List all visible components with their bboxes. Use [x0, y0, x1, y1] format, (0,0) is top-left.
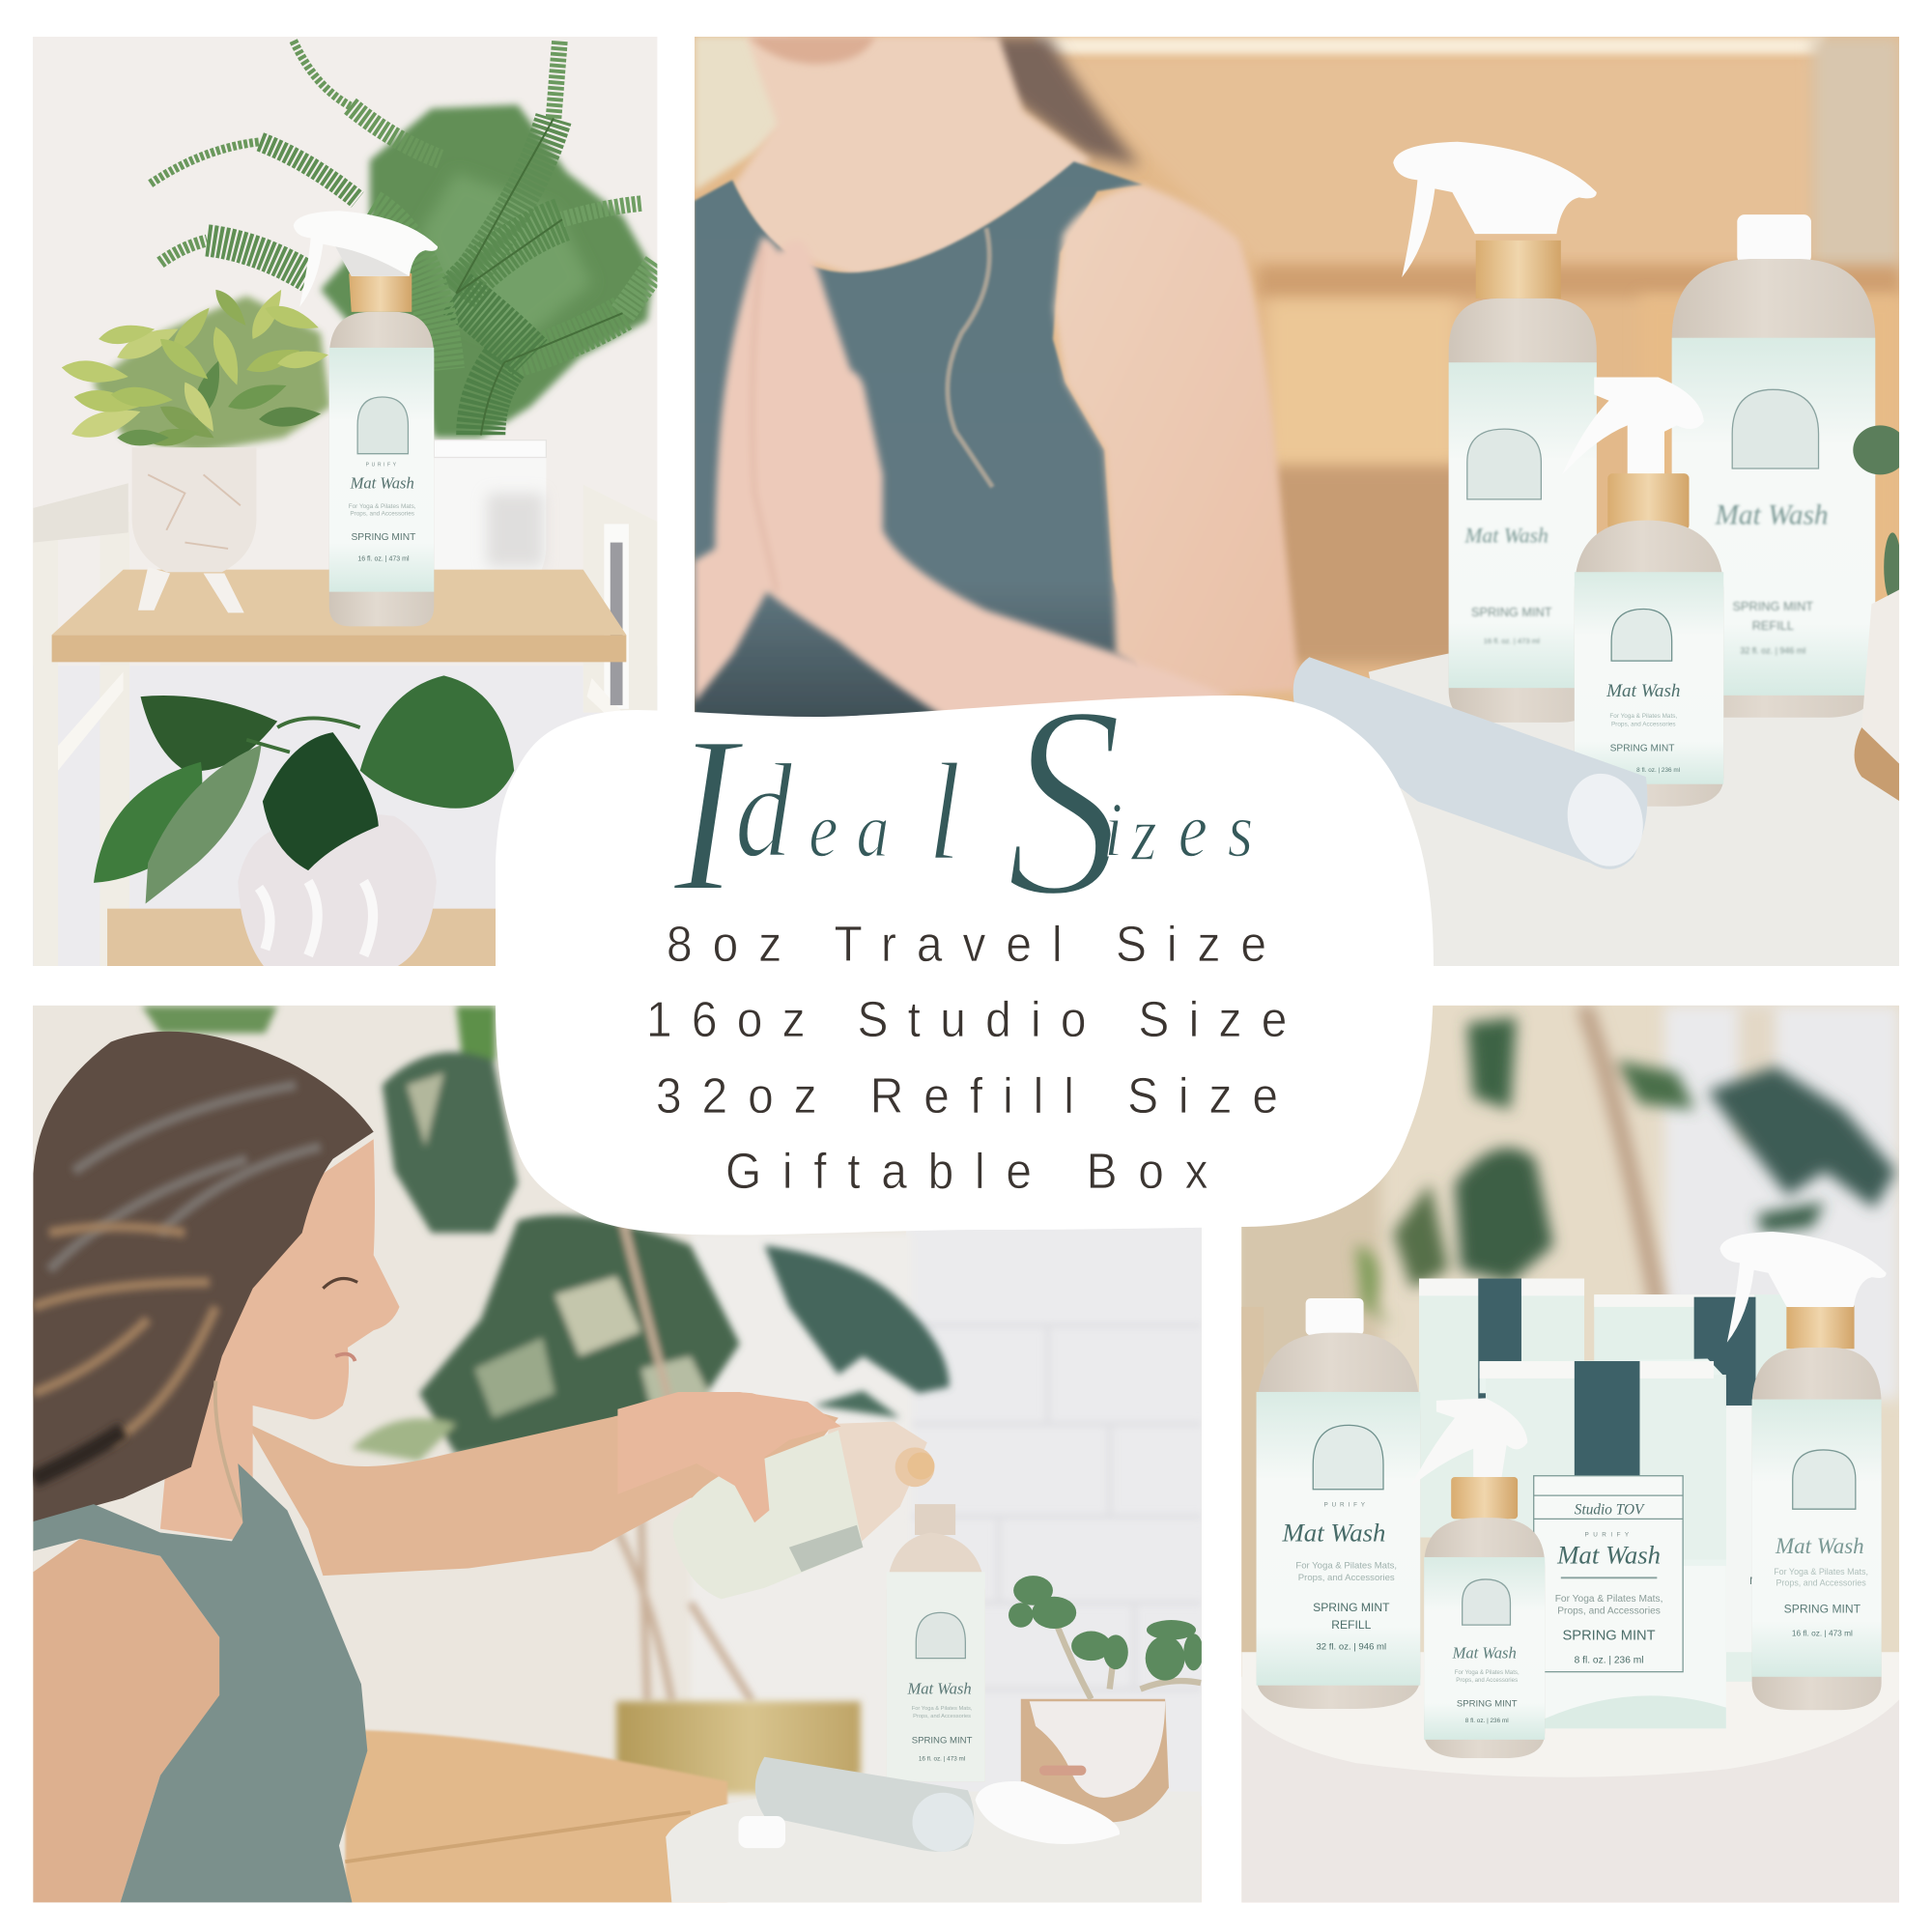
upright bottle: Props, and Accessories	[913, 1714, 971, 1719]
bottle: Mat Wash	[350, 473, 414, 492]
upright bottle: Mat Wash	[906, 1680, 972, 1698]
spray bottle 16oz: 16 fl. oz. | 473 ml	[1484, 637, 1540, 645]
panel: woman pouring refill	[32, 1005, 1204, 1905]
title: Ideal Sizes: e	[1179, 788, 1208, 873]
refill bottle 32oz: For Yoga & Pilates Mats,	[1295, 1560, 1397, 1571]
refill bottle 32oz: REFILL	[1331, 1618, 1372, 1632]
hair	[33, 1032, 374, 1603]
title: Ideal Sizes: e	[809, 788, 838, 873]
tilted refill bottle	[673, 1422, 934, 1599]
bottle	[294, 211, 438, 626]
small pump bottle 8oz	[1410, 1398, 1545, 1758]
bottle: 16 fl. oz. | 473 ml	[357, 556, 410, 563]
title: Ideal Sizes: S	[1006, 649, 1122, 953]
front gift box: Studio TOV	[1575, 1501, 1645, 1518]
small pump bottle 8oz: Mat Wash	[1605, 681, 1680, 701]
title: Ideal Sizes: d	[735, 736, 793, 886]
front gift box: PURIFY	[1584, 1531, 1634, 1538]
small pump bottle 8oz	[1562, 378, 1723, 807]
bottle: For Yoga & Pilates Mats,	[349, 503, 416, 510]
spray bottle 16oz: SPRING MINT	[1471, 605, 1552, 619]
hand on bottle	[617, 1392, 840, 1522]
bare shoulder	[33, 1539, 222, 1905]
refill bottle 32oz: Props, and Accessories	[1298, 1573, 1395, 1583]
size list	[646, 916, 1287, 1199]
gold planter	[616, 1701, 861, 1794]
title: Ideal Sizes: z	[1130, 792, 1157, 877]
left leafy plant	[60, 285, 330, 452]
upright bottle: For Yoga & Pilates Mats,	[912, 1706, 973, 1712]
front gift box: For Yoga & Pilates Mats,	[1555, 1594, 1662, 1605]
bottle: SPRING MINT	[351, 532, 415, 543]
fern plant	[151, 41, 657, 438]
spray bottle 16oz: 16 fl. oz. | 473 ml	[1792, 1629, 1853, 1638]
neck and chest skin	[733, 36, 1092, 277]
title: Ideal Sizes: a	[857, 788, 890, 873]
title: Ideal Sizes: i	[1104, 788, 1122, 873]
praying hands and forearms	[695, 237, 1233, 724]
white sprayer head lying on table	[976, 1781, 1120, 1844]
green tank top	[33, 1463, 367, 1905]
small pump bottle 8oz: 8 fl. oz. | 236 ml	[1636, 767, 1680, 774]
small pump bottle 8oz: For Yoga & Pilates Mats,	[1455, 1669, 1520, 1676]
shelf frame	[33, 483, 657, 968]
rolled towel	[755, 1757, 974, 1852]
refill bottle 32oz: Mat Wash	[1281, 1518, 1385, 1547]
small pump bottle 8oz: 8 fl. oz. | 236 ml	[1465, 1718, 1509, 1724]
size list: 8oz Travel Size	[667, 916, 1266, 972]
left constellation pot	[132, 447, 256, 612]
spray bottle 16oz: Mat Wash	[1463, 525, 1548, 548]
front gift box: 8 fl. oz. | 236 ml	[1575, 1656, 1643, 1666]
shoulder and arm	[1054, 185, 1298, 696]
spray bottle 16oz: Mat Wash	[1775, 1534, 1864, 1558]
front gift box: SPRING MINT	[1563, 1628, 1656, 1643]
small plant and ceramic pot at edge	[1853, 425, 1899, 801]
back left box	[1419, 1279, 1584, 1538]
refill bottle 32oz: SPRING MINT	[1313, 1601, 1390, 1614]
size list: 32oz Refill Size	[656, 1067, 1278, 1123]
blurred leather sofa	[1036, 36, 1901, 664]
background potted tree	[142, 1006, 950, 1701]
refill bottle 32oz: Mat Wash	[1714, 499, 1829, 530]
spray bottle 16oz	[1719, 1232, 1887, 1710]
rolled towel	[1293, 657, 1653, 874]
small pump bottle 8oz: For Yoga & Pilates Mats,	[1609, 713, 1677, 720]
white brick wall	[691, 1227, 1202, 1806]
refill bottle 32oz: SPRING MINT	[1733, 599, 1813, 613]
spray bottle 16oz: For Yoga & Pilates Mats,	[1774, 1567, 1868, 1577]
refill bottle 32oz	[1672, 214, 1875, 718]
back right box: MINT	[1749, 1576, 1776, 1587]
bottle: PURIFY	[366, 462, 399, 468]
panel: shelf with plants and bottle	[32, 36, 659, 968]
white table	[1369, 624, 1900, 967]
spray bottle 16oz: Props, and Accessories	[1776, 1577, 1866, 1587]
title: Ideal Sizes: s	[1228, 788, 1253, 873]
blonde and brown hair	[695, 36, 1141, 191]
plinth	[1241, 1652, 1900, 1905]
chin shadow	[749, 36, 875, 64]
back right box	[1594, 1294, 1791, 1682]
leather sofa	[345, 1730, 727, 1905]
spray bottle 16oz	[1393, 142, 1597, 723]
refill bottle 32oz: 32 fl. oz. | 946 ml	[1316, 1642, 1386, 1653]
small pump bottle 8oz: SPRING MINT	[1457, 1698, 1518, 1709]
front gift box: Props, and Accessories	[1557, 1606, 1661, 1617]
size list: 16oz Studio Size	[646, 991, 1287, 1047]
teal tank top	[695, 161, 1143, 720]
small table	[666, 1791, 1201, 1905]
upright bottle: SPRING MINT	[912, 1736, 973, 1747]
refill bottle 32oz	[1257, 1298, 1420, 1709]
upright bottle: 16 fl. oz. | 473 ml	[919, 1756, 965, 1763]
refill bottle 32oz: 32 fl. oz. | 946 ml	[1740, 645, 1805, 655]
title: Ideal Sizes: I	[672, 689, 745, 939]
spray bottle 16oz: SPRING MINT	[1784, 1602, 1861, 1615]
lower shelf and pot	[107, 732, 501, 968]
white callout blob	[496, 696, 1434, 1235]
wooden shelf	[52, 570, 626, 662]
loose hair strand	[948, 228, 992, 487]
woman arm	[246, 1393, 838, 1576]
blurred background plant	[1356, 1006, 1896, 1325]
front gift box	[1480, 1358, 1726, 1728]
white cap	[739, 1816, 785, 1848]
back right box: TOV	[1764, 1486, 1787, 1497]
title: Ideal Sizes: l	[928, 735, 961, 890]
size list: Giftable Box	[725, 1143, 1208, 1199]
refill bottle 32oz: REFILL	[1752, 618, 1794, 633]
small pump bottle 8oz: Props, and Accessories	[1611, 722, 1676, 728]
right white pot	[435, 440, 547, 570]
bottle: Props, and Accessories	[350, 510, 414, 517]
small pump bottle 8oz: Mat Wash	[1452, 1644, 1517, 1662]
face and neck	[160, 1139, 400, 1541]
panel: woman in prayer pose with products	[695, 36, 1907, 967]
small pump bottle 8oz: SPRING MINT	[1610, 743, 1674, 753]
potted succulent	[1009, 1576, 1204, 1822]
upright bottle	[887, 1504, 985, 1781]
pothos plant leaves	[94, 675, 514, 904]
small pump bottle 8oz: Props, and Accessories	[1456, 1677, 1518, 1684]
front gift box: Mat Wash	[1556, 1540, 1661, 1569]
refill bottle 32oz: PURIFY	[1324, 1502, 1369, 1509]
panel: product family on plinth	[1233, 1005, 1900, 1905]
